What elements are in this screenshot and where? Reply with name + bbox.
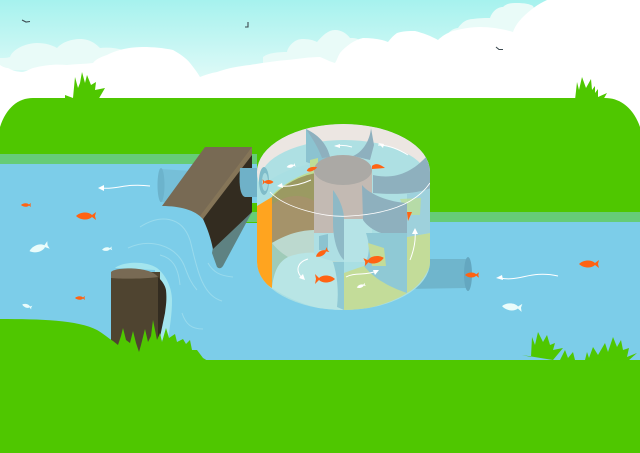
flow lines xyxy=(128,219,233,329)
spillway chute xyxy=(162,147,252,268)
front clouds xyxy=(0,0,640,130)
back clouds xyxy=(0,3,550,70)
post light water collar xyxy=(115,263,172,340)
lime floor back xyxy=(272,170,316,197)
sky xyxy=(0,0,640,100)
front-left blade xyxy=(333,262,344,310)
water margin band right xyxy=(420,212,640,222)
outlet pipe xyxy=(405,257,472,291)
rear-left blade xyxy=(306,129,330,165)
arrow: right pond flow xyxy=(496,274,558,280)
chute top face xyxy=(162,147,252,219)
fish: small orange, lower left xyxy=(75,296,85,300)
floor shade back xyxy=(272,230,338,262)
post body xyxy=(111,272,160,355)
fish: exiting pipe xyxy=(465,272,479,278)
fish: orange, right pond xyxy=(579,260,599,268)
inner water surface xyxy=(264,140,420,203)
near-left bank with grass xyxy=(0,319,208,361)
connector pipe: chute to turbine xyxy=(240,168,260,197)
back wall olive xyxy=(271,173,316,243)
foreground bank xyxy=(0,360,640,453)
pale floor left xyxy=(272,253,344,312)
orange left panel xyxy=(257,197,272,288)
fish: small white, lower left xyxy=(22,303,32,309)
fish: orange, left pond xyxy=(76,212,96,220)
white fish inside turbine xyxy=(286,163,296,168)
fish inside turbine xyxy=(262,179,274,185)
fish: white, left pond xyxy=(28,241,50,255)
grass tuft: front right xyxy=(522,332,637,361)
fish: small white xyxy=(102,246,112,252)
post top face xyxy=(111,268,158,279)
top rim xyxy=(257,124,430,182)
fish: white, right pond xyxy=(502,302,522,312)
birds xyxy=(22,20,503,50)
lime floor front xyxy=(344,266,407,312)
hub body xyxy=(314,170,372,233)
grass tuft: back left xyxy=(65,72,105,100)
green gap band behind chute xyxy=(240,203,260,223)
upper-right blade xyxy=(373,157,431,194)
front-right blade xyxy=(364,233,407,293)
water margin band left xyxy=(0,154,257,164)
water: left section xyxy=(0,164,257,364)
arrow: left pond flow xyxy=(98,185,150,191)
fish: small orange, upper left xyxy=(21,203,31,207)
mid-right blade xyxy=(362,185,407,234)
grass tuft: back right xyxy=(575,77,607,100)
mid-left blade xyxy=(333,190,344,260)
drum body xyxy=(257,124,430,310)
post dark side xyxy=(158,277,166,337)
right wall glass xyxy=(407,188,430,237)
inlet ring xyxy=(259,167,269,195)
far bank xyxy=(0,98,640,230)
hub top xyxy=(314,155,372,185)
chute underside shadow xyxy=(212,205,252,268)
floor shade left xyxy=(272,243,288,287)
turbine xyxy=(257,124,431,312)
rear pipe xyxy=(158,168,192,204)
rear-right blade xyxy=(353,128,374,160)
water: right section xyxy=(250,222,640,365)
lime right wall xyxy=(407,233,430,293)
chute dark side xyxy=(203,150,252,249)
flow arrows inside turbine xyxy=(270,145,430,279)
concrete post xyxy=(111,268,166,355)
